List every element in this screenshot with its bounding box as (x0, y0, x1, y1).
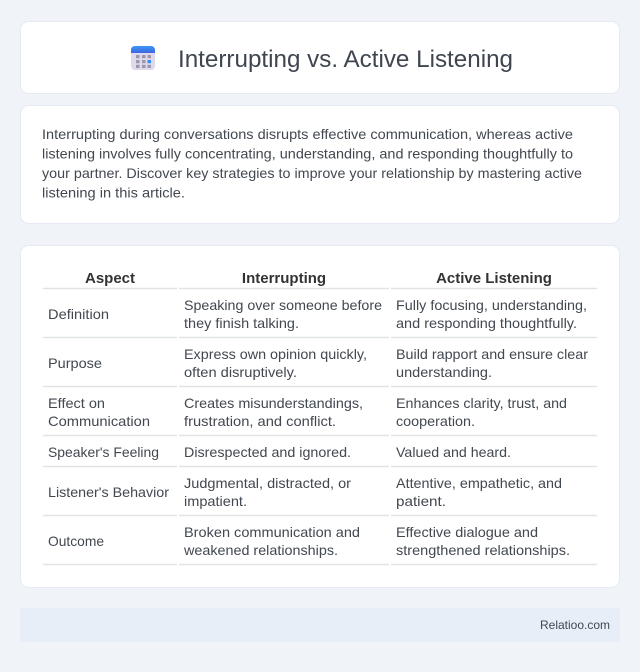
table rules (43, 288, 597, 564)
footer credit: Relatioo.com (540, 618, 610, 632)
row: definition: Definition (48, 306, 109, 322)
row: outcome: Effective dialogue and (396, 524, 538, 540)
row: speaker's feeling: Speaker's Feeling (48, 444, 159, 460)
panel: comparison table (20, 246, 620, 588)
row: speaker's feeling: Disrespected and ignored. (184, 444, 351, 460)
text block: introduction: your partner. Discover key strategies to improve your relationship by mastering active (42, 165, 582, 181)
row: purpose: understanding. (396, 364, 492, 380)
title: Interrupting vs. Active Listening (178, 46, 513, 73)
row: listener's behavior: Listener's Behavior (48, 484, 169, 500)
text block: introduction (42, 126, 582, 200)
text block: introduction: Interrupting during conversations disrupts effective communication, whereas active (42, 126, 573, 142)
row: effect on communication: Enhances clarity, trust, and (396, 395, 567, 411)
row: definition: Speaking over someone before (184, 297, 382, 313)
table header: Interrupting (242, 270, 326, 287)
table header (85, 270, 552, 287)
row: outcome (48, 524, 570, 558)
row: purpose: often disruptively. (184, 364, 297, 380)
row: outcome: Broken communication and (184, 524, 360, 540)
row: listener's behavior: patient. (396, 493, 446, 509)
row: definition: and responding thoughtfully. (396, 315, 577, 331)
text block: introduction: listening in this article. (42, 184, 185, 200)
row: speaker's feeling (48, 444, 511, 460)
row: purpose: Build rapport and ensure clear (396, 346, 588, 362)
footer (20, 608, 620, 642)
row: outcome: Outcome (48, 533, 104, 549)
row: listener's behavior: impatient. (184, 493, 247, 509)
row: effect on communication: Creates misunderstandings, (184, 395, 363, 411)
panel: introduction (20, 106, 620, 224)
row: effect on communication (48, 395, 567, 429)
row: definition (48, 297, 587, 331)
icon: calendar (131, 46, 155, 70)
row: effect on communication: frustration, and conflict. (184, 413, 336, 429)
row: outcome: strengthened relationships. (396, 542, 570, 558)
row: effect on communication: Communication (48, 413, 150, 429)
row: definition: Fully focusing, understanding, (396, 297, 587, 313)
row: effect on communication: cooperation. (396, 413, 475, 429)
row: outcome: weakened relationships. (183, 542, 338, 558)
row: listener's behavior: Attentive, empathetic, and (396, 475, 562, 491)
row: purpose: Express own opinion quickly, (184, 346, 367, 362)
text block: introduction: listening involves fully concentrating, understanding, and responding thoughtfully to (42, 146, 573, 162)
row: listener's behavior (48, 475, 562, 509)
row: purpose (48, 346, 588, 380)
row: speaker's feeling: Valued and heard. (396, 444, 511, 460)
row: purpose: Purpose (48, 355, 102, 371)
table header: Active Listening (436, 270, 552, 287)
row: listener's behavior: Judgmental, distracted, or (184, 475, 351, 491)
row: definition: they finish talking. (184, 315, 299, 331)
panel: header card (20, 22, 620, 94)
table header: Aspect (85, 270, 135, 287)
row: effect on communication: Effect on (48, 395, 105, 411)
